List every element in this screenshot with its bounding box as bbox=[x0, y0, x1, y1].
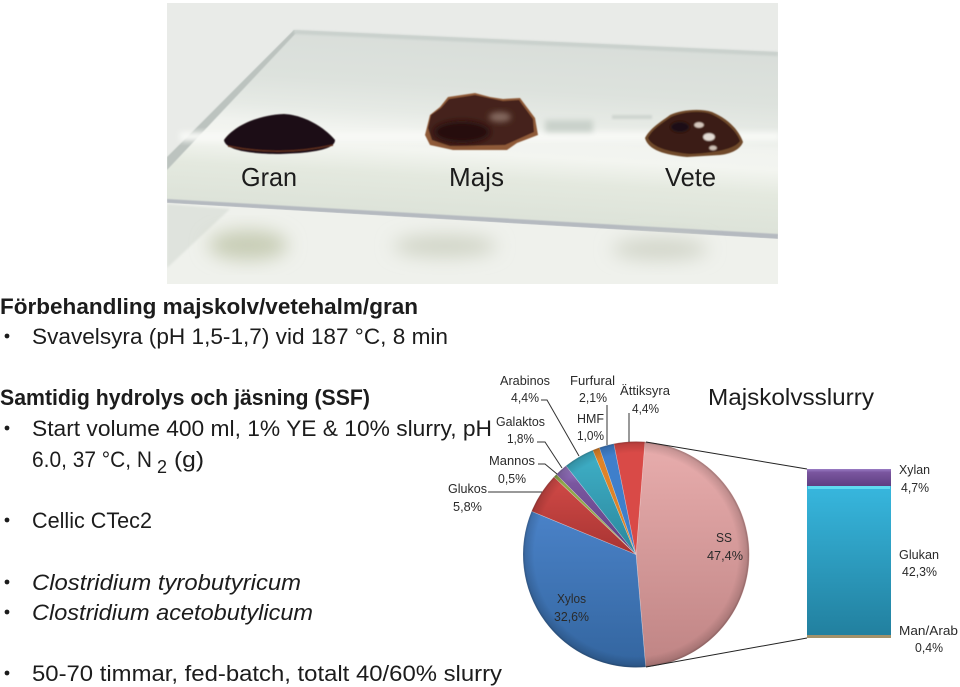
label: Xylan: 4,7% bbox=[901, 480, 929, 495]
slice: Ättiksyra bbox=[614, 441, 645, 554]
label: SS: 47,4% bbox=[707, 548, 743, 563]
text block: pretreatment: Förbehandling majskolv/vetehalm/gran bbox=[0, 294, 418, 319]
text block: SSF conditions: Clostridium acetobutylicum bbox=[32, 600, 313, 625]
label: Furfural: 2,1% bbox=[579, 390, 607, 405]
text block: SSF conditions: Clostridium tyrobutyricum bbox=[32, 570, 301, 595]
label: Xylos: Xylos bbox=[557, 591, 586, 606]
slice: Galaktos bbox=[556, 466, 636, 554]
label: Ättiksyra: Ättiksyra bbox=[620, 383, 671, 398]
label: Galaktos: Galaktos bbox=[496, 414, 545, 429]
sample label: Gran: Gran bbox=[241, 162, 297, 192]
text block: SSF conditions bbox=[0, 385, 502, 686]
label: Glukan: Glukan bbox=[899, 547, 939, 562]
slice: Xylos bbox=[523, 511, 646, 668]
label: Arabinos bbox=[500, 373, 550, 405]
label: Furfural: Furfural bbox=[570, 373, 615, 388]
label: Ättiksyra bbox=[620, 383, 671, 416]
photo: three slurry samples on glass bbox=[167, 3, 780, 284]
stacked bar: SS breakdown bbox=[807, 469, 891, 638]
slice: SS bbox=[636, 442, 749, 667]
label: Galaktos bbox=[496, 414, 545, 446]
text block: SSF conditions: Cellic CTec2 bbox=[32, 508, 152, 533]
sample label: Vete: Vete bbox=[665, 162, 716, 192]
label: Man/Arab: 0,4% bbox=[915, 640, 943, 655]
label: Arabinos: 4,4% bbox=[511, 390, 539, 405]
label: Arabinos: Arabinos bbox=[500, 373, 550, 388]
label: Ättiksyra: 4,4% bbox=[632, 401, 659, 416]
label: Glukos: Glukos bbox=[448, 481, 487, 496]
slice: Glukos bbox=[532, 477, 636, 554]
slice: HMF bbox=[593, 448, 636, 554]
label: Furfural bbox=[570, 373, 615, 405]
sample label: Majs: Majs bbox=[449, 162, 504, 192]
connector lines: pie to stacked bar bbox=[646, 442, 807, 667]
bar segment: Glukan bbox=[807, 486, 891, 635]
label: Xylan: Xylan bbox=[899, 462, 930, 477]
label: Glukos bbox=[448, 481, 487, 514]
text block: SSF conditions: 6.0, 37 °C, N bbox=[32, 447, 152, 472]
label: Xylos: 32,6% bbox=[554, 609, 589, 624]
label: Man/Arab bbox=[899, 623, 958, 655]
sample: Gran bbox=[224, 114, 335, 154]
bar segment: Man/Arab bbox=[807, 635, 891, 638]
shadow: reflections under samples bbox=[208, 230, 708, 260]
text block: SSF conditions: (g) bbox=[174, 447, 204, 472]
label: Xylos bbox=[554, 591, 589, 624]
label: Mannos bbox=[489, 453, 535, 486]
pie chart: slurry composition bbox=[523, 441, 749, 668]
text block: SSF conditions: 2 bbox=[157, 457, 167, 477]
label: SS: SS bbox=[716, 530, 732, 545]
label: Man/Arab: Man/Arab bbox=[899, 623, 958, 638]
heading: Majskolvsslurry: Majskolvsslurry bbox=[708, 384, 875, 410]
sample: Majs bbox=[425, 93, 538, 150]
text block: pretreatment bbox=[0, 294, 448, 349]
label: HMF: 1,0% bbox=[577, 428, 604, 443]
label: Glukan: 42,3% bbox=[902, 564, 937, 579]
slice: Furfural bbox=[599, 444, 636, 554]
text block: SSF conditions: Start volume 400 ml, 1% YE & 10% slurry, pH bbox=[32, 416, 492, 441]
text block: SSF conditions: 50-70 timmar, fed-batch, totalt 40/60% slurry bbox=[32, 661, 502, 686]
label: Mannos: 0,5% bbox=[498, 471, 526, 486]
label: Glukos: 5,8% bbox=[453, 499, 482, 514]
label: Galaktos: 1,8% bbox=[507, 431, 534, 446]
slice: Mannos bbox=[554, 474, 636, 554]
bar segment: Xylan bbox=[807, 469, 891, 486]
text block: pretreatment: Svavelsyra (pH 1,5-1,7) vid 187 °C, 8 min bbox=[32, 324, 448, 349]
label: Glukan bbox=[899, 547, 939, 579]
label: Mannos: Mannos bbox=[489, 453, 535, 468]
text block: SSF conditions: Samtidig hydrolys och jäsning (SSF) bbox=[0, 385, 370, 410]
sample: Vete bbox=[645, 110, 743, 157]
label: HMF: HMF bbox=[577, 411, 604, 426]
label: SS bbox=[707, 530, 743, 563]
leader lines bbox=[488, 400, 629, 492]
slice: Arabinos bbox=[566, 450, 636, 554]
pie labels bbox=[448, 373, 958, 655]
label: HMF bbox=[577, 411, 604, 443]
label: Xylan bbox=[899, 462, 930, 495]
